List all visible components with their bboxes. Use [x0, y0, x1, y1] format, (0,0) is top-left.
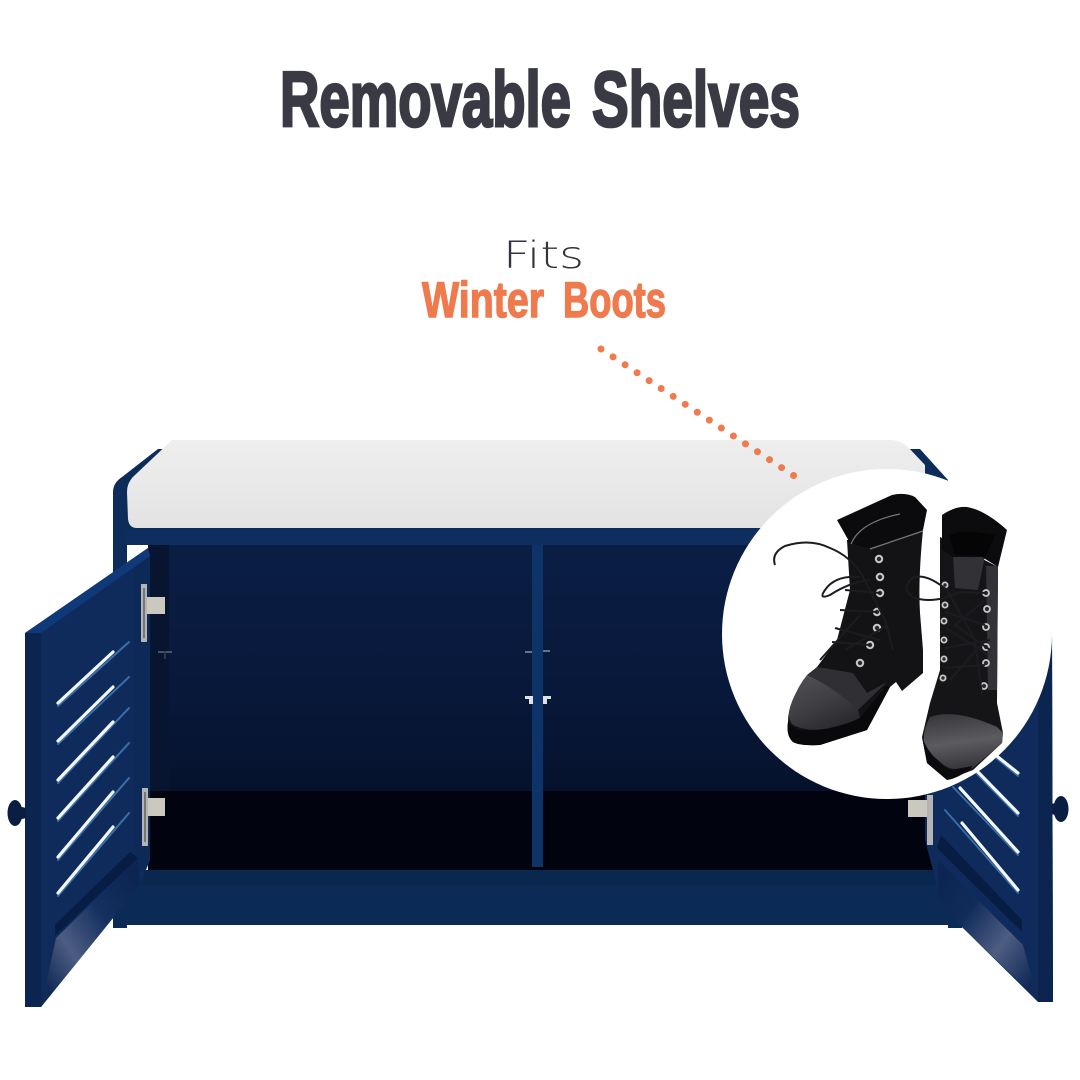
boot shaft	[788, 530, 923, 745]
door bottom bevel	[41, 858, 140, 1007]
sole	[788, 686, 890, 745]
title: Shelves	[592, 55, 800, 143]
hinges	[141, 584, 165, 846]
door louvres	[58, 642, 129, 896]
cabinet body	[113, 449, 948, 600]
laces	[907, 576, 990, 695]
dotted leader arrow	[601, 349, 802, 481]
title: Removable	[280, 55, 571, 143]
callout text	[422, 234, 666, 328]
centre divider	[532, 545, 543, 867]
door louvres	[945, 757, 1018, 893]
feet	[113, 900, 962, 928]
door inner stile	[133, 556, 150, 880]
bottom rail	[127, 870, 948, 925]
cabinet interior side	[148, 545, 933, 795]
door edge	[25, 633, 41, 1007]
hinge	[908, 795, 933, 845]
white circle	[722, 469, 1052, 799]
top rail	[125, 530, 935, 545]
left door	[8, 548, 165, 1007]
door edge	[1038, 632, 1053, 1002]
door knob	[1052, 796, 1068, 822]
seat cushion	[127, 440, 925, 528]
cabinet back panel	[169, 545, 929, 792]
door knob	[8, 800, 26, 826]
toe cap	[789, 675, 860, 730]
vamp	[807, 667, 887, 710]
eyelets	[857, 556, 883, 666]
laces	[774, 542, 893, 660]
bench	[8, 440, 1068, 1007]
door recess	[55, 852, 138, 936]
callout: Winter Boots	[422, 272, 666, 328]
side panel highlight	[986, 566, 998, 690]
collar	[942, 507, 1007, 567]
door recess	[937, 835, 1022, 932]
boot shaft	[922, 537, 1003, 780]
eyelets	[940, 582, 990, 689]
toe cap	[924, 714, 1003, 770]
callout: Winter Boots: Boots	[563, 272, 666, 328]
sole	[922, 737, 973, 780]
right door	[908, 545, 1068, 1002]
cabinet floor	[148, 791, 933, 871]
collar	[837, 494, 927, 548]
boots callout	[722, 469, 1052, 799]
door bottom bevel	[938, 860, 1038, 1000]
door top bevel	[25, 548, 150, 633]
callout: Fits: Fits	[503, 234, 584, 277]
callout: Winter Boots: Winter	[422, 272, 544, 328]
left boot	[774, 494, 927, 745]
tongue	[953, 556, 985, 590]
right boot	[907, 507, 1007, 780]
shelf brackets	[158, 650, 551, 704]
